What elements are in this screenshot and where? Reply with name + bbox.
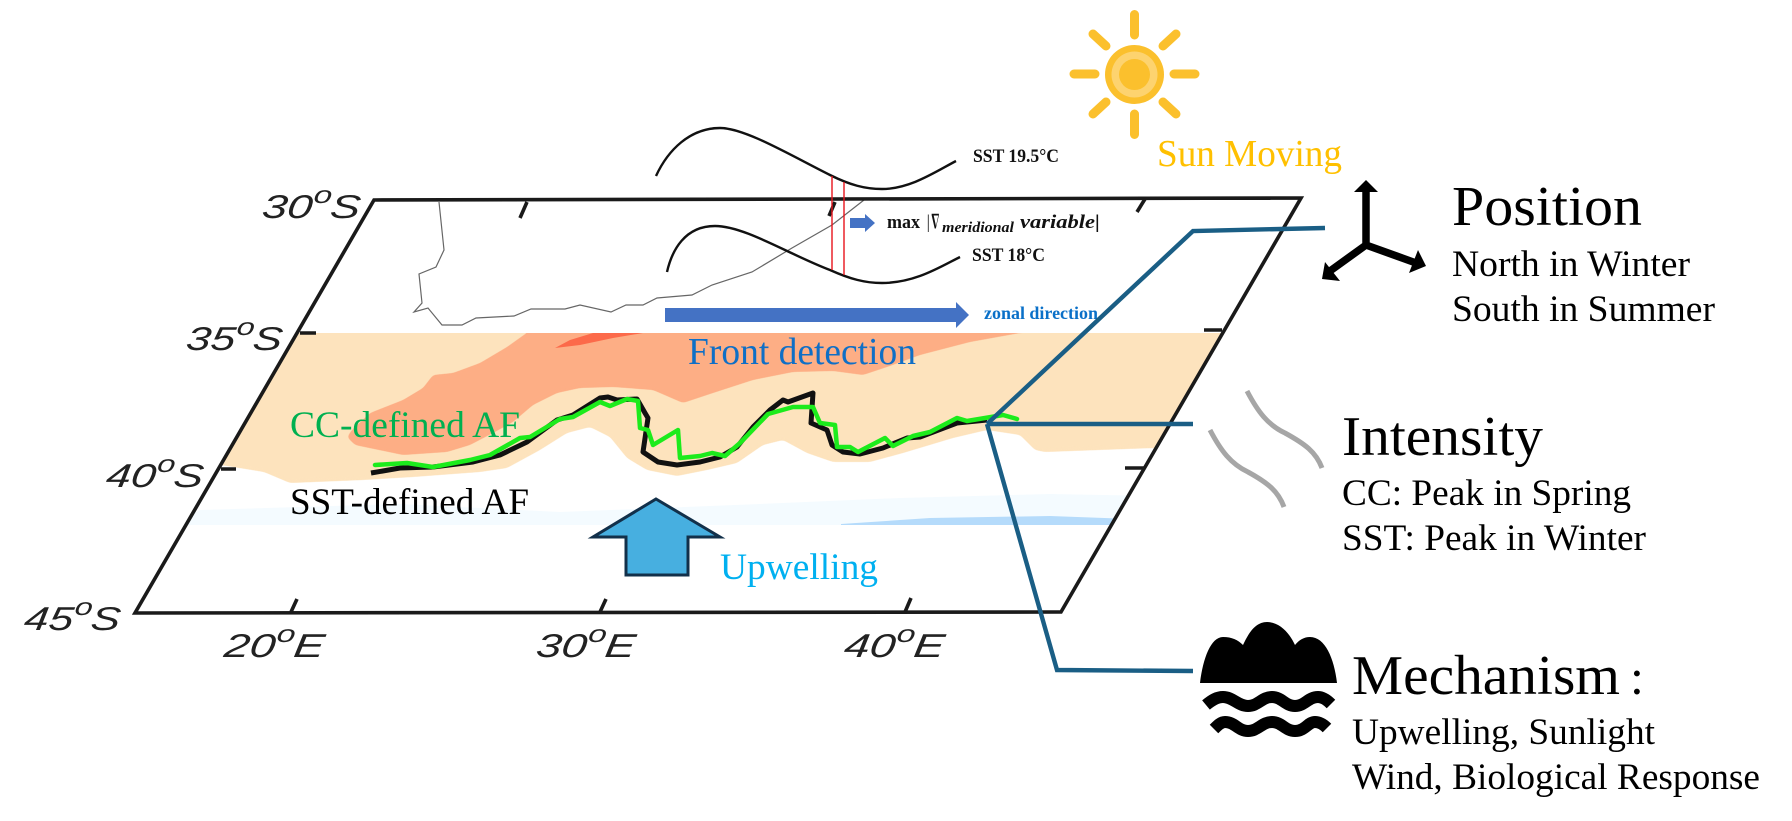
arrow: zonal direction [665, 302, 969, 328]
text block: position: Position [1452, 176, 1642, 238]
label: max gradient formula: max [887, 212, 920, 233]
arrow: upwelling [593, 499, 720, 575]
latitude and longitude labels: S [251, 321, 285, 358]
latitude and longitude labels: E [291, 628, 328, 665]
CC-defined front line [375, 399, 1017, 467]
latitude and longitude labels: o [895, 621, 918, 648]
latitude and longitude labels: 30 [260, 189, 302, 226]
label: max gradient formula: meridional [942, 220, 1015, 236]
latitude and longitude labels: S [89, 601, 123, 638]
label: max gradient formula: |∇ [927, 212, 941, 233]
latitude and longitude labels: o [156, 451, 177, 478]
text block: position: South in Summer [1452, 289, 1715, 330]
text block: intensity: SST: Peak in Winter [1342, 518, 1646, 559]
latitude and longitude labels: S [171, 458, 206, 495]
panel: map fields [188, 333, 1220, 525]
latitude and longitude labels: 20 [222, 628, 264, 665]
icon: position axes [1322, 180, 1426, 281]
latitude and longitude labels: o [73, 594, 95, 621]
icon: intensity waves [1210, 391, 1322, 507]
label: SST 19.5: SST 19.5°C [973, 147, 1059, 167]
latitude and longitude labels: o [587, 621, 609, 648]
map field: orange region [348, 333, 1022, 455]
latitude and longitude labels: o [235, 314, 257, 341]
text block: mechanism: Mechanism [1352, 645, 1620, 707]
label: front detection: Front detection [688, 331, 916, 373]
latitude and longitude labels: 45 [22, 601, 64, 638]
label: CC-defined AF: CC-defined AF [290, 405, 520, 446]
connector lines [987, 228, 1325, 671]
text block: intensity [1342, 406, 1646, 559]
text block: position: North in Winter [1452, 244, 1690, 285]
text block: intensity: CC: Peak in Spring [1342, 473, 1631, 514]
label: SST-defined AF: SST-defined AF [290, 482, 529, 523]
red gradient markers [832, 176, 844, 275]
latitude and longitude labels: o [312, 182, 334, 209]
map frame with ticks [135, 198, 1301, 613]
coastline [414, 200, 864, 325]
latitude and longitude labels: E [911, 628, 948, 665]
latitude and longitude labels: E [603, 628, 639, 665]
label: max gradient formula [887, 212, 1100, 236]
label: max gradient formula: variable| [1020, 212, 1100, 233]
SST 19.5 contour curve [656, 128, 956, 189]
label: SST 18: SST 18°C [972, 246, 1045, 266]
label: sun moving: Sun Moving [1157, 133, 1342, 175]
label: zonal direction: zonal direction [984, 303, 1098, 323]
map field: red core [555, 333, 643, 348]
text block: mechanism: Upwelling, Sunlight [1352, 712, 1656, 753]
map field: light beige band [222, 333, 1220, 483]
SST-defined front line [371, 393, 987, 473]
latitude and longitude labels: 40 [104, 458, 146, 495]
latitude and longitude labels: o [275, 621, 298, 648]
latitude and longitude labels: 40 [842, 628, 884, 665]
latitude and longitude labels [22, 182, 949, 665]
latitude and longitude labels: S [328, 189, 363, 226]
icon: sun [1074, 14, 1195, 134]
latitude and longitude labels: 35 [184, 321, 226, 358]
text block: mechanism [1352, 645, 1760, 798]
map field: pale blue band [170, 494, 1160, 525]
text block: mechanism: : [1630, 649, 1644, 705]
text block: position [1452, 176, 1715, 330]
SST 18 contour curve [667, 226, 960, 283]
icon: mechanism mountains and waves [1200, 622, 1337, 731]
map field: blue sliver [841, 516, 1130, 525]
text block: mechanism: Wind, Biological Response [1352, 757, 1760, 798]
arrow: max gradient [850, 214, 875, 232]
text block: intensity: Intensity [1342, 406, 1543, 468]
latitude and longitude labels: 30 [534, 628, 576, 665]
label: upwelling: Upwelling [720, 547, 878, 588]
